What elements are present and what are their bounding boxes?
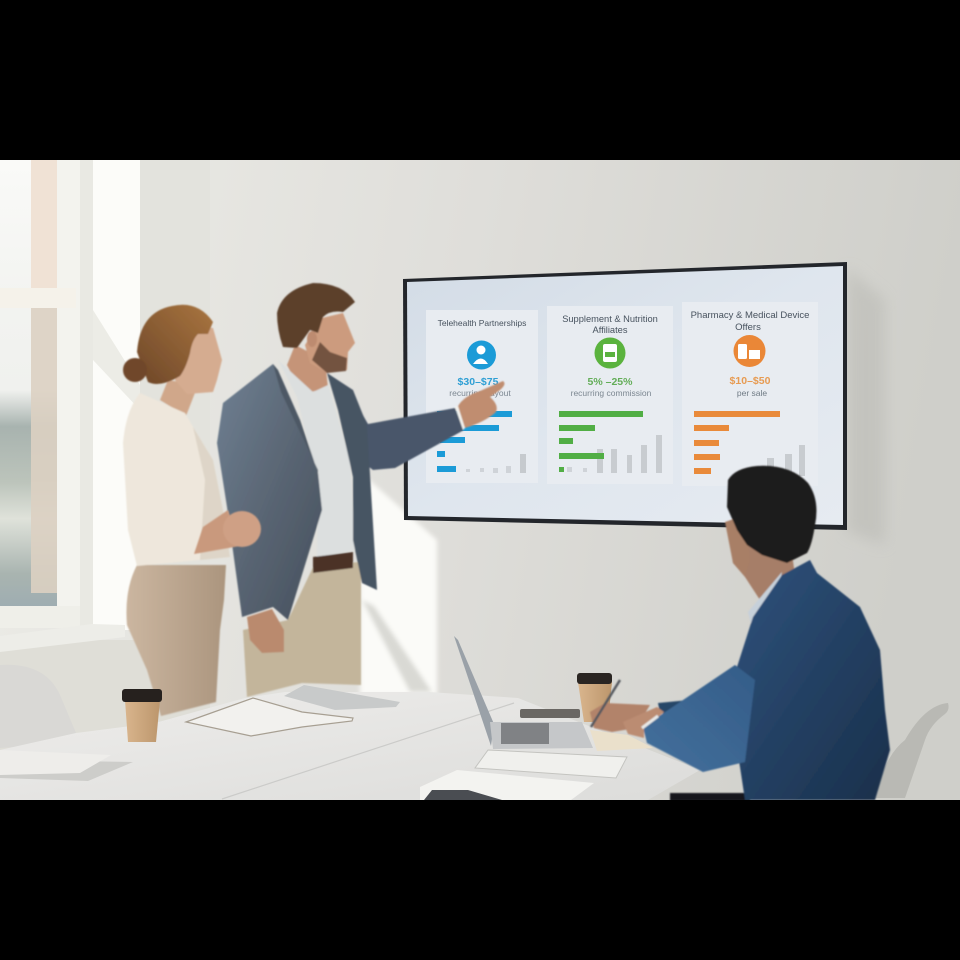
neck [287,345,328,394]
hair [137,305,213,384]
bar chart: blue [437,411,526,473]
near sleeve [643,665,755,772]
icon: pharmacy [734,335,766,367]
papers bottom [420,770,594,800]
panel: pharmacy and device offers: Offers [735,322,761,333]
panel: telehealth partnerships [426,310,538,483]
heading: Pharmacy & Medical Device [691,310,809,321]
forearm [194,510,240,554]
jacket right front [327,373,377,590]
value: $30–$75 [458,376,499,388]
seated man [590,466,890,801]
caption: recurring commission [571,388,652,398]
woman [123,305,230,716]
value: 5% –25% [588,376,633,388]
face [175,325,222,394]
black lower band [0,800,960,960]
lapel left [273,364,318,473]
panel: supplement affiliates [547,306,673,484]
window sill [0,624,125,652]
left notebooks [0,750,133,781]
laptop screen [454,636,494,746]
heading: Telehealth Partnerships [438,318,526,328]
coffee cup left [122,689,162,742]
laptop keyboard [501,723,549,744]
table [0,692,700,800]
pointing cuff [455,405,466,430]
shirt collar [748,572,782,640]
table seam [222,703,514,799]
woman's hands [194,510,261,554]
belt [313,552,353,573]
trousers [126,565,226,716]
panel: supplement affiliates: Affiliates [593,325,628,335]
far sleeve [658,697,720,717]
face [725,515,750,576]
caption: per sale [737,388,767,398]
shirt [278,360,355,557]
trousers [243,562,361,697]
window glass [0,160,57,606]
screen display [407,266,843,525]
window frame [57,160,80,625]
tablet [284,685,400,710]
papers front [475,750,627,778]
dark folder [424,790,502,800]
pointing hand [458,381,504,428]
jacket left front [217,364,322,620]
presenter [217,283,504,697]
neck [160,380,198,416]
panel: pharmacy and device offers [682,302,818,486]
back wall [0,160,960,800]
near hand [623,707,664,738]
caption: recurring payout [449,388,511,398]
coffee cup right [577,673,612,722]
heading: Supplement & Nutrition [562,314,658,324]
lower wall under window [0,640,210,750]
neck [730,540,795,600]
beard [312,342,347,373]
brick outside [31,160,57,290]
clasped hands [223,511,261,547]
left hand [247,609,284,653]
notebook under hand [590,730,653,751]
black upper band [0,0,960,160]
wall screen [403,262,847,530]
hair bun [123,358,147,382]
right chair [875,703,949,798]
torso [727,560,890,800]
pointing arm [360,408,464,470]
open notebook [186,698,353,736]
window alcove pillar [140,160,210,700]
icon: supplement bottle [594,338,626,368]
laptop [454,636,593,749]
bar chart: orange [694,411,805,476]
pen [591,680,620,727]
watch [642,716,658,728]
hair [727,466,816,563]
far hand [590,703,650,732]
face [305,313,355,373]
bar chart: green [559,411,662,473]
laptop base [490,722,593,749]
blouse shading [193,427,230,560]
icon: doctor [467,340,496,370]
alcove reveal [90,160,140,630]
value: $10–$50 [730,375,771,387]
photo: meeting room presentation [0,160,960,800]
trousers [670,793,750,801]
hair [277,283,355,348]
sunlight on wall [360,472,437,695]
blouse [122,394,204,567]
ear [307,331,317,347]
shadow behind screen [848,279,884,538]
screen bezel [403,262,847,530]
phone [520,709,580,718]
window [0,160,125,652]
left chair [0,665,76,748]
